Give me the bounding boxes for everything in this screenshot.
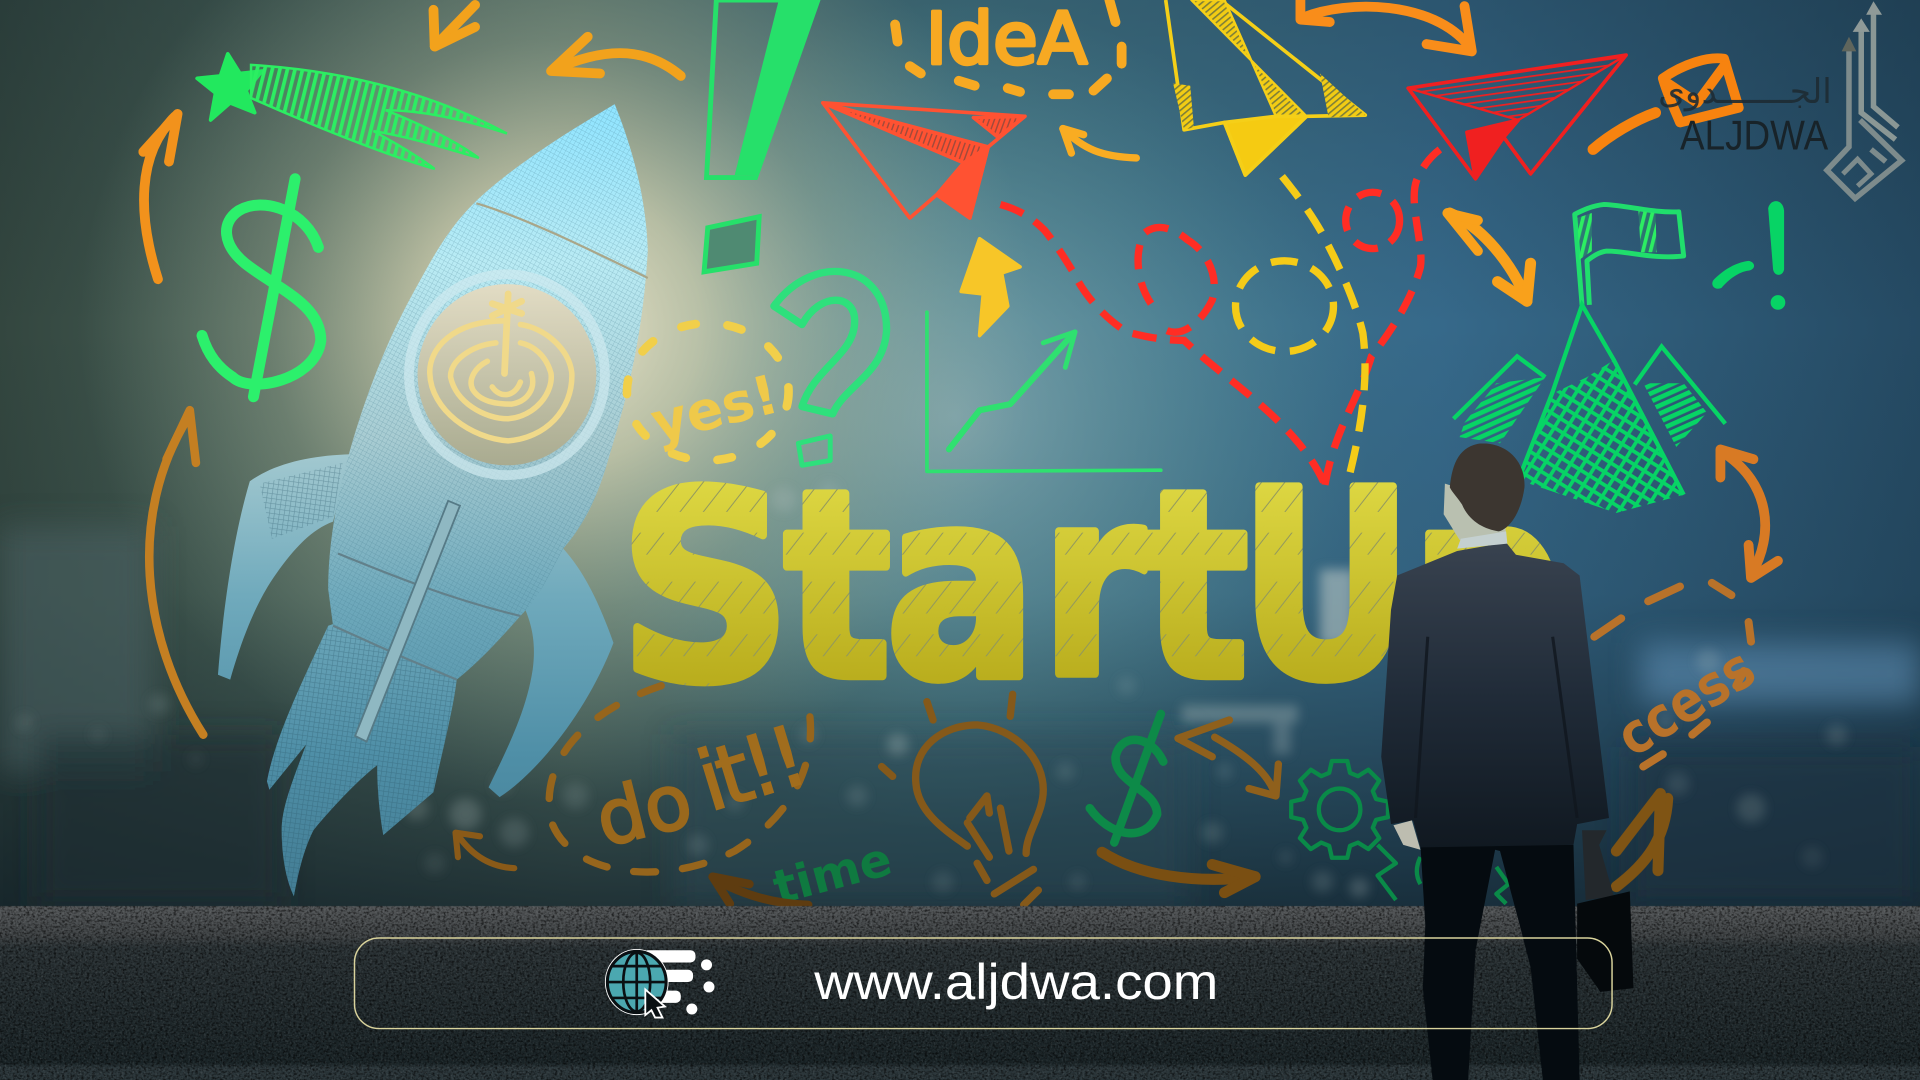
rocket stripe (355, 501, 460, 742)
idea oval (895, 0, 1122, 94)
orange arrow: top centre (551, 37, 681, 76)
bar outline (354, 938, 1612, 1029)
startup headline: U (1239, 436, 1413, 738)
concrete ledge (0, 906, 1920, 1080)
orange arrow: top left (433, 5, 475, 47)
icon: globe with cursor (605, 949, 714, 1018)
window swirl (430, 294, 572, 441)
rocket flame hatching (267, 626, 457, 896)
question mark (774, 271, 887, 465)
suit jacket (1381, 542, 1609, 847)
red paper plane right (1408, 55, 1626, 179)
briefcase (1577, 891, 1633, 992)
lower brown arrow (713, 877, 808, 905)
startup headline: r (1041, 433, 1146, 735)
orange arrow: upper left (143, 114, 178, 279)
yellow dashed route (1236, 176, 1365, 485)
do it doodle (549, 686, 818, 872)
idea doodle (895, 0, 1122, 94)
chart line (949, 334, 1073, 449)
rocket (218, 104, 648, 896)
startup headline: p (1411, 436, 1565, 738)
rocket window ring (409, 274, 605, 475)
exclamation dot (704, 217, 759, 272)
small orange arrow under idea (1063, 129, 1136, 158)
chart axes (927, 312, 1161, 471)
rocket left fin hatching (260, 463, 343, 539)
red dashed route (1000, 144, 1447, 485)
time word: time (767, 832, 897, 915)
logo calligraphic arrows (1827, 1, 1902, 198)
shirt collar (1457, 531, 1507, 549)
rocket body (328, 104, 648, 680)
success oval (1594, 583, 1751, 767)
orange arrow right (1720, 449, 1778, 578)
legs (1420, 845, 1580, 1080)
question mark dot (798, 436, 830, 465)
neck and ear (1444, 484, 1506, 540)
idea word: IdeA (926, 0, 1087, 81)
startup headline: t (784, 436, 891, 738)
small orange arrow lower left (456, 833, 514, 868)
brown double arrow (1178, 720, 1278, 796)
it word: it!! (687, 707, 818, 831)
lightbulb doodle (882, 694, 1043, 905)
orange double arrow top (1300, 0, 1472, 51)
do it oval (549, 686, 811, 872)
star (197, 54, 262, 120)
mountains (1453, 305, 1725, 513)
startup headline: S (618, 438, 792, 740)
logo (1658, 1, 1902, 198)
website url: www.aljdwa.com (813, 954, 1218, 1010)
flag on mountain (1575, 204, 1684, 305)
dollar sign green (202, 179, 321, 397)
hands (1393, 820, 1420, 850)
rocket lower band (333, 553, 520, 680)
startup headline (618, 433, 1565, 740)
success doodle (1594, 583, 1767, 770)
yellow upward arrow (961, 239, 1020, 336)
orange envelope (1593, 58, 1739, 149)
rocket left fin (218, 454, 350, 680)
yes word: yes! (645, 363, 785, 455)
brown lower arrow (1102, 852, 1255, 893)
comet streaks (251, 65, 507, 169)
yellow paper plane (1166, 0, 1365, 175)
blurred city skyline (0, 481, 1920, 906)
do it words: do (587, 756, 700, 864)
orange curved arrow right of route (1447, 213, 1531, 301)
bag handle (1582, 830, 1614, 900)
rocket nose line (476, 203, 648, 278)
logo arabic wordmark: الجـــــــدوى (1658, 72, 1832, 112)
rocket flames (267, 612, 457, 896)
success word: ccess (1606, 636, 1767, 770)
comet star (197, 54, 507, 169)
startup headline: t (1141, 436, 1249, 738)
dollar sign lower (1090, 714, 1163, 842)
businessman (1381, 443, 1633, 1080)
orange arrow: lower left (149, 410, 203, 735)
exclamation bar (707, 0, 818, 178)
exclamation mark (704, 0, 818, 272)
hair (1450, 443, 1525, 531)
startup headline: a (885, 436, 1037, 738)
rocket window (418, 284, 596, 465)
red paper plane left (823, 103, 1025, 218)
logo latin wordmark: ALJDWA (1680, 111, 1828, 158)
brown arrow right of man (1616, 793, 1668, 887)
gear doodle (1291, 761, 1509, 904)
growth chart (927, 312, 1161, 471)
green exclamation (1712, 201, 1785, 310)
website bar (354, 938, 1612, 1029)
yes doodle (627, 323, 789, 460)
suit sleeve shading (1416, 637, 1577, 818)
rocket right fin (489, 549, 613, 797)
yes oval (627, 323, 789, 460)
